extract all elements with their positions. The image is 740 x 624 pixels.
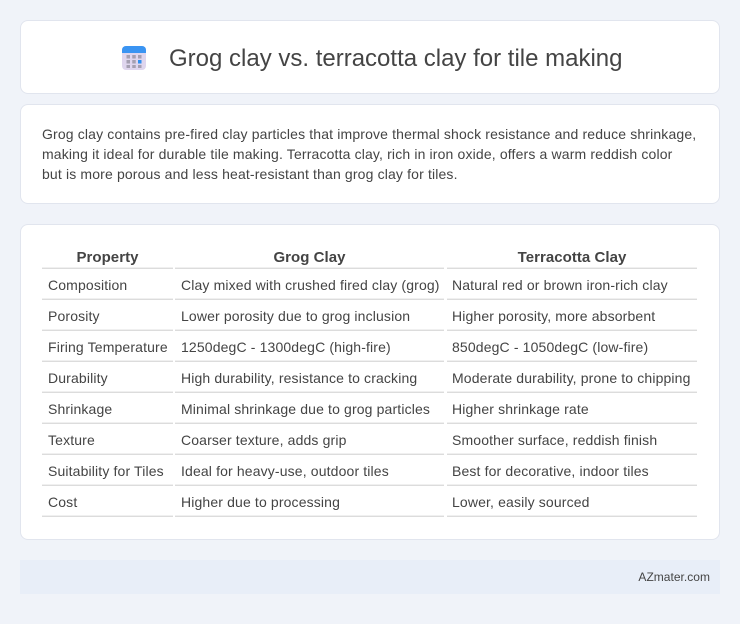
column header: Property: Property [76, 249, 138, 266]
row: Firing Temperature: 850degC - 1050degC (low-fire) [452, 339, 648, 355]
row: Shrinkage [48, 401, 589, 417]
row: Composition: Clay mixed with crushed fired clay (grog) [181, 277, 440, 293]
row: Cost: Higher due to processing [181, 494, 340, 510]
row: Texture: Texture [48, 432, 95, 448]
row: Shrinkage: Higher shrinkage rate [452, 401, 589, 417]
title: Grog clay vs. terracotta clay for tile making [169, 45, 622, 72]
row: Composition: Composition [48, 277, 127, 293]
summary text [42, 126, 696, 182]
summary text: making it ideal for durable tile making. Terracotta clay, rich in iron oxide, offers a warm reddish color [42, 146, 672, 162]
row: Texture: Smoother surface, reddish finish [452, 432, 657, 448]
column header: Terracotta Clay: Terracotta Clay [518, 249, 626, 266]
summary panel [20, 104, 720, 204]
row: Texture [48, 432, 657, 448]
row: Cost: Lower, easily sourced [452, 494, 590, 510]
footer credit: AZmater.com [638, 570, 710, 584]
row: Durability: Durability [48, 370, 108, 386]
row: Porosity: Higher porosity, more absorbent [452, 308, 655, 324]
row: Porosity [48, 308, 656, 324]
row: Cost [48, 494, 590, 510]
row: Porosity: Porosity [48, 308, 100, 324]
row: Firing Temperature: 1250degC - 1300degC (high-fire) [181, 339, 391, 355]
column header: Grog Clay: Grog Clay [273, 249, 346, 266]
table panel [20, 224, 720, 540]
icon: calendar [122, 46, 146, 70]
row: Firing Temperature [48, 339, 648, 355]
title panel [20, 20, 720, 94]
row: Cost: Cost [48, 494, 77, 510]
summary text: Grog clay contains pre-fired clay particles that improve thermal shock resistance and reduce shrinkage, [42, 126, 696, 142]
row: Texture: Coarser texture, adds grip [181, 432, 346, 448]
row: Suitability for Tiles [48, 463, 649, 479]
row: Shrinkage: Shrinkage [48, 401, 112, 417]
row: Composition: Natural red or brown iron-rich clay [452, 277, 668, 293]
row: Durability: High durability, resistance to cracking [181, 370, 417, 386]
row: Shrinkage: Minimal shrinkage due to grog particles [181, 401, 430, 417]
row: Suitability for Tiles: Suitability for Tiles [48, 463, 164, 479]
row: Suitability for Tiles: Ideal for heavy-use, outdoor tiles [181, 463, 389, 479]
footer bar [20, 560, 720, 594]
row: Porosity: Lower porosity due to grog inclusion [181, 308, 410, 324]
row: Suitability for Tiles: Best for decorative, indoor tiles [452, 463, 649, 479]
row: Durability: Moderate durability, prone to chipping [452, 370, 691, 386]
row: Durability [48, 370, 691, 386]
row: Firing Temperature: Firing Temperature [48, 339, 168, 355]
row: Composition [48, 277, 668, 293]
summary text: but is more porous and less heat-resistant than grog clay for tiles. [42, 166, 458, 182]
